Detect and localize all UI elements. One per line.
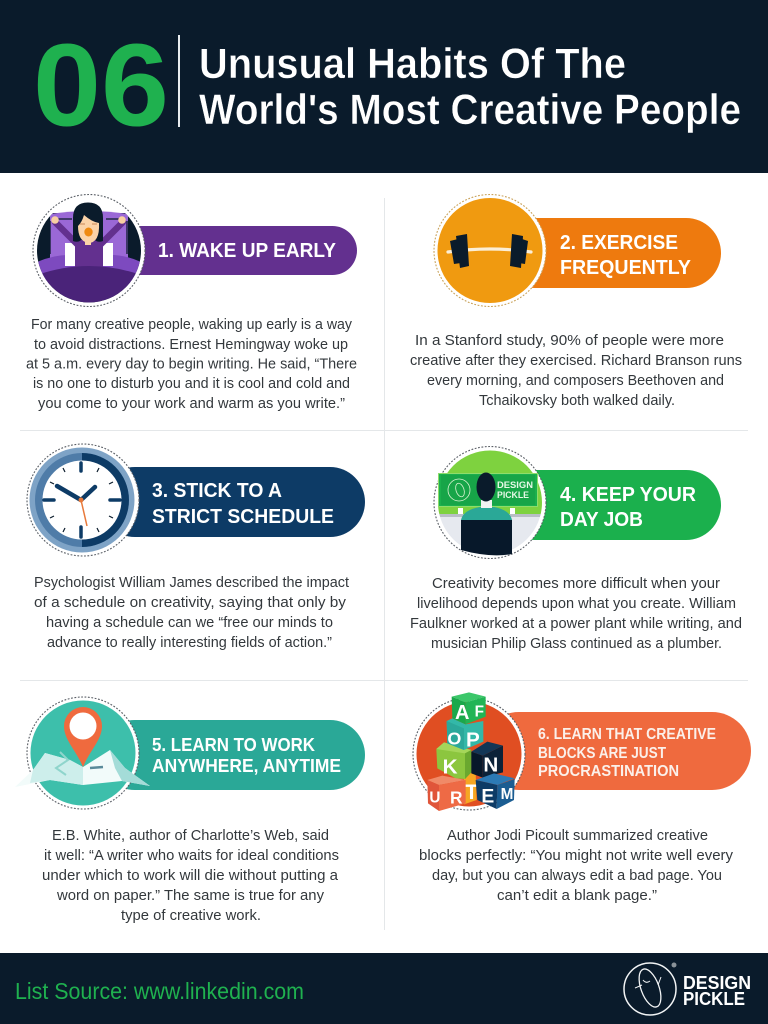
header band [0, 0, 768, 173]
banner 3: 3. STICK TO A [152, 480, 282, 502]
text 2: Tchaikovsky both walked daily. [479, 392, 675, 409]
text 4: Creativity becomes more difficult when your [432, 575, 720, 592]
banner 3 [100, 467, 365, 537]
big number 06: 06 [33, 20, 169, 150]
banner 2: FREQUENTLY [560, 257, 692, 279]
logo: design pickle: PICKLE [683, 989, 745, 1009]
text 3 [34, 574, 350, 651]
text 5 [42, 827, 339, 924]
panel 2: exercise frequently [410, 194, 742, 409]
banner 5 [100, 720, 365, 790]
text 1: is no one to disturb you and it is cool and cold and [33, 375, 350, 392]
text 5: under which to work will die without putting a [42, 867, 339, 884]
banner 4: DAY JOB [560, 509, 643, 531]
banner 5: ANYWHERE, ANYTIME [152, 756, 341, 776]
text 3: having a schedule can we “free our minds to [46, 614, 333, 631]
text 6: can’t edit a blank page.” [497, 887, 657, 904]
banner 5: 5. LEARN TO WORK [152, 735, 315, 755]
title: Unusual Habits Of The [199, 40, 626, 88]
text 5: word on paper.” The same is true for any [56, 887, 324, 904]
text 2 [410, 332, 742, 409]
footer band [0, 953, 768, 1024]
text 4 [410, 575, 742, 652]
banner 6: 6. LEARN THAT CREATIVE [538, 726, 716, 743]
icon: barbell [434, 194, 546, 306]
list source: List Source: www.linkedin.com [15, 978, 304, 1004]
text 4: livelihood depends upon what you create. William [417, 595, 736, 612]
text 2: creative after they exercised. Richard Branson runs [410, 352, 742, 369]
text 6: day, but you can always edit a bad page. You [432, 867, 722, 884]
icon: letter blocks: N [483, 754, 498, 777]
banner 6 [480, 712, 751, 790]
text 1: to avoid distractions. Ernest Hemingway woke up [34, 336, 348, 353]
text 5: it well: “A writer who waits for ideal conditions [44, 847, 339, 864]
logo: design pickle: DESIGN [683, 973, 751, 993]
icon: letter blocks: P [466, 728, 480, 751]
panel 6: creative blocks [413, 692, 751, 904]
banner 2: 2. EXERCISE [560, 232, 678, 254]
banner 1: 1. WAKE UP EARLY [158, 240, 337, 262]
logo: design pickle [624, 962, 751, 1015]
panel 5: learn to work anywhere [15, 697, 365, 924]
banner 2 [500, 218, 721, 288]
icon: letter blocks: O [447, 728, 461, 748]
icon: woman waking in bed [30, 194, 150, 313]
text 1: at 5 a.m. every day to begin writing. He said, “There [26, 356, 357, 372]
icon: letter blocks: K [443, 756, 458, 779]
banner 3: STRICT SCHEDULE [152, 506, 334, 528]
text 6: Author Jodi Picoult summarized creative [447, 827, 708, 844]
icon: person at desk: PICKLE [497, 490, 529, 501]
icon: clock [27, 444, 139, 556]
banner 6: PROCRASTINATION [538, 763, 679, 780]
text 4: musician Philip Glass continued as a plumber. [431, 635, 722, 652]
text 1: For many creative people, waking up early is a way [31, 316, 352, 333]
banner 1 [100, 226, 357, 275]
text 1 [26, 316, 357, 412]
text 6: blocks perfectly: “You might not write well every [419, 847, 733, 864]
icon: person at desk [430, 445, 550, 560]
icon: letter blocks: E [481, 786, 494, 807]
icon: letter blocks: U [429, 789, 440, 806]
icon: letter blocks: R [450, 788, 463, 808]
banner 4 [500, 470, 721, 540]
text 6 [419, 827, 733, 904]
title [199, 40, 741, 134]
text 5: E.B. White, author of Charlotte’s Web, said [52, 827, 329, 844]
text 1: you come to your work and warm as you write.” [38, 395, 345, 412]
icon: letter blocks: A [455, 702, 469, 724]
icon: letter blocks: T [465, 780, 478, 804]
icon: letter blocks [413, 692, 525, 811]
icon: letter blocks: F [475, 703, 484, 720]
text 5: type of creative work. [121, 907, 261, 924]
icon: person at desk: DESIGN [497, 480, 533, 491]
text 2: In a Stanford study, 90% of people were more [415, 332, 724, 349]
panel 3: stick to a strict schedule [27, 444, 365, 651]
icon: letter blocks: M [501, 786, 513, 803]
text 3: of a schedule on creativity, saying that only by [34, 594, 346, 611]
text 2: every morning, and composers Beethoven and [427, 372, 724, 389]
text 4: Faulkner worked at a power plant while writing, and [410, 615, 742, 632]
banner 6: BLOCKS ARE JUST [538, 745, 666, 762]
panel 4: keep your day job [410, 445, 742, 652]
text 3: advance to really interesting fields of action.” [47, 634, 332, 651]
panel 1: wake up early [26, 194, 357, 412]
icon: map pin [15, 697, 150, 809]
text 3: Psychologist William James described the impact [34, 574, 350, 591]
banner 4: 4. KEEP YOUR [560, 484, 697, 506]
